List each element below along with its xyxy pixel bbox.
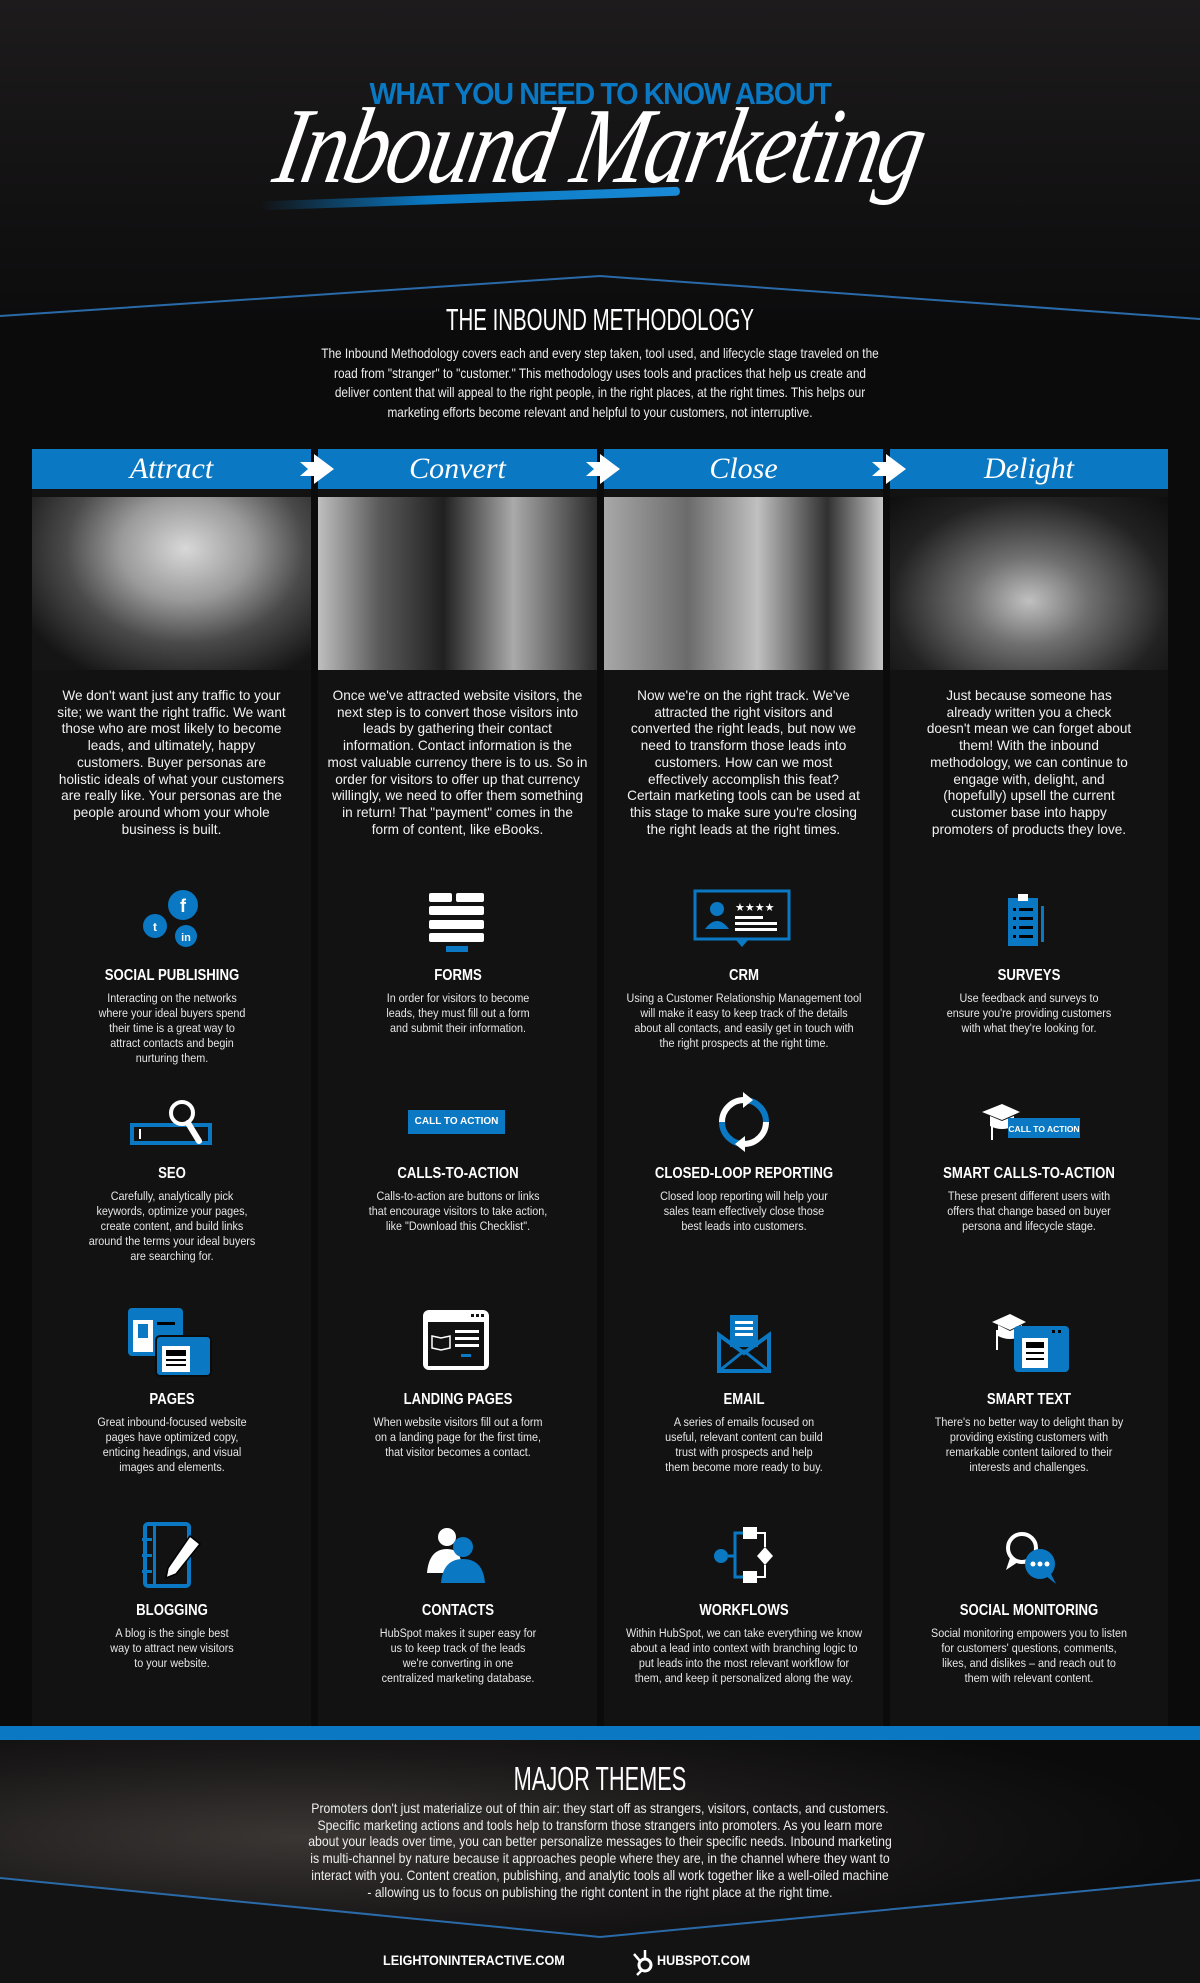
item: workflows: them, and keep it personalized along the way.: [635, 1671, 853, 1685]
stage header: Convert: [318, 449, 597, 489]
footer: hubspot logo: [632, 1946, 656, 1976]
stage header: Attract: Attract: [130, 452, 213, 485]
item: pages: [97, 1391, 247, 1474]
text: convert: order for visitors to offer up that currency: [335, 772, 580, 787]
major themes background: [0, 1740, 1200, 1983]
icon: social: [143, 890, 198, 947]
text: close: Certain marketing tools can be used at: [627, 788, 860, 803]
text: close: attracted the right visitors and: [654, 705, 833, 720]
item: seo: keywords, optimize your pages,: [97, 1204, 247, 1218]
item: crm: the right prospects at the right time.: [660, 1036, 828, 1050]
item: contacts: us to keep track of the leads: [391, 1641, 525, 1655]
text: delight: Just because someone has: [946, 688, 1112, 703]
item: calls-to-action: CALLS-TO-ACTION: [397, 1165, 519, 1182]
methodology intro text: marketing efforts become relevant and helpful to your customers, not interruptive.: [387, 404, 813, 420]
major themes text: is multi-channel by nature because it approaches people where they are, in the channel where they want to: [310, 1851, 890, 1866]
item: social publishing: Interacting on the networks: [107, 991, 237, 1005]
item: calls-to-action: like "Download this Checklist".: [386, 1219, 530, 1233]
blue band: [0, 1726, 1200, 1740]
text: convert: information. Contact information is the: [343, 738, 572, 753]
item: closed-loop reporting: [655, 1165, 833, 1233]
item: pages: enticing headings, and visual: [103, 1445, 241, 1459]
item: social publishing: where your ideal buyers spend: [99, 1006, 245, 1020]
title: [266, 76, 934, 210]
text: delight: methodology, we can continue to: [930, 755, 1128, 770]
icon: smart cta: CALL TO ACTION: [1008, 1124, 1080, 1134]
text: delight: (hopefully) upsell the current: [943, 788, 1115, 803]
stage header: Convert: Convert: [409, 452, 506, 485]
major themes text: - allowing us to focus on publishing the right content in the right place at the right time.: [367, 1885, 833, 1900]
icon: seo: [130, 1100, 212, 1145]
arrow 2: [586, 454, 620, 484]
item: contacts: we're converting in one: [403, 1656, 513, 1670]
methodology intro text: deliver content that will appeal to the right people, in the right places, at the right times. This helps our: [335, 385, 865, 400]
item: landing pages: on a landing page for the first time,: [375, 1430, 541, 1444]
item: crm: Using a Customer Relationship Management tool: [627, 991, 861, 1005]
item: seo: Carefully, analytically pick: [111, 1189, 233, 1203]
stage header: Attract: [32, 449, 311, 489]
major themes text: about your leads over time, you can better personalize messages to their specific needs. Inbound marketing: [308, 1834, 892, 1849]
item: email: them become more ready to buy.: [665, 1460, 823, 1474]
icon: social: t: [153, 920, 157, 934]
item: workflows: WORKFLOWS: [699, 1602, 789, 1619]
item: seo: [89, 1165, 255, 1263]
item: crm: about all contacts, and easily get in touch with: [634, 1021, 854, 1035]
major themes text: Promoters don't just materialize out of thin air: they start off as strangers, visitors, contacts, and customers.: [311, 1801, 889, 1816]
icon: blogging: [142, 1522, 201, 1588]
top chevron line: [0, 275, 1200, 320]
item: crm: [627, 967, 861, 1050]
item: blogging: [110, 1602, 234, 1670]
icon: call to action: CALL TO ACTION: [415, 1116, 498, 1127]
item: smart calls-to-action: These present different users with: [948, 1189, 1110, 1203]
item: contacts: HubSpot makes it super easy for: [380, 1626, 536, 1640]
icon: pages: [128, 1308, 210, 1375]
item: smart text: interests and challenges.: [969, 1460, 1089, 1474]
methodology intro text: The Inbound Methodology covers each and every step taken, tool used, and lifecycle stage traveled on the: [321, 346, 879, 361]
item: closed-loop reporting: best leads into customers.: [681, 1219, 807, 1233]
text: convert: form of content, like eBooks.: [372, 822, 543, 837]
footer: hubspot: HUBSPOT.COM: [657, 1952, 750, 1968]
icon: smart text: [992, 1314, 1069, 1372]
text: delight: engage with, delight, and: [953, 772, 1105, 787]
item: workflows: about a lead into context with branching logic to: [630, 1641, 858, 1655]
icon: email: [717, 1315, 771, 1373]
item: blogging: BLOGGING: [136, 1602, 208, 1619]
item: seo: around the terms your ideal buyers: [89, 1234, 255, 1248]
script title: Inbound Marketing: [266, 87, 934, 206]
footer: leighton: LEIGHTONINTERACTIVE.COM: [383, 1952, 565, 1968]
item: social monitoring: for customers' questions, comments,: [941, 1641, 1117, 1655]
item: social publishing: their time is a great way to: [109, 1021, 235, 1035]
item: forms: FORMS: [434, 967, 482, 984]
item: email: [665, 1391, 823, 1474]
item: social publishing: [98, 967, 245, 1065]
icon: social: f: [180, 896, 187, 916]
item: blogging: A blog is the single best: [115, 1626, 229, 1640]
item: smart text: There's no better way to delight than by: [935, 1415, 1123, 1429]
photo: close: [604, 497, 883, 670]
text: close: this stage to make sure you're closing: [630, 805, 857, 820]
photo: attract: [32, 497, 311, 670]
item: social monitoring: SOCIAL MONITORING: [960, 1602, 1098, 1619]
item: smart calls-to-action: [943, 1165, 1115, 1233]
item: email: trust with prospects and help: [675, 1445, 813, 1459]
methodology heading: THE INBOUND METHODOLOGY: [446, 302, 754, 337]
item: social publishing: SOCIAL PUBLISHING: [105, 967, 239, 984]
icon: crm: ★★★★: [735, 901, 775, 914]
icon: crm: [694, 890, 790, 947]
stage header: Delight: Delight: [984, 452, 1074, 485]
text: convert: Once we've attracted website visitors, the: [333, 688, 582, 703]
methodology intro text: [321, 346, 879, 420]
icon: closed loop: [719, 1092, 769, 1152]
item: surveys: Use feedback and surveys to: [959, 991, 1099, 1005]
icon: contacts: [427, 1528, 485, 1583]
item: closed-loop reporting: Closed loop reporting will help your: [660, 1189, 828, 1203]
text: convert: [328, 688, 587, 837]
major themes text: interact with you. Content creation, publishing, and analytic tools all work together like a well-oiled machine: [311, 1868, 889, 1883]
item: social monitoring: [889, 1602, 1169, 1686]
item: smart text: SMART TEXT: [987, 1391, 1071, 1408]
bottom chevron: [0, 1870, 1200, 1983]
item: closed-loop reporting: CLOSED-LOOP REPORTING: [655, 1165, 833, 1182]
item: seo: SEO: [158, 1165, 186, 1182]
brush stroke: [260, 187, 680, 210]
item: social monitoring: them with relevant content.: [965, 1671, 1093, 1685]
major themes heading: MAJOR THEMES: [514, 1760, 686, 1797]
item: social monitoring: Social monitoring empowers you to listen: [931, 1626, 1127, 1640]
icon: smart cta: [982, 1104, 1080, 1140]
item: email: useful, relevant content can build: [665, 1430, 823, 1444]
item: email: EMAIL: [724, 1391, 764, 1408]
item: smart text: remarkable content tailored to their: [946, 1445, 1112, 1459]
icon: call to action: [408, 1110, 505, 1134]
text: convert: next step is to convert those visitors into: [337, 705, 578, 720]
text: convert: leads by gathering their contact: [363, 721, 552, 736]
title kicker: WHAT YOU NEED TO KNOW ABOUT: [370, 76, 830, 111]
icon: forms: [429, 893, 484, 952]
major themes text: [267, 1801, 933, 1901]
text: delight: already written you a check: [947, 705, 1111, 720]
item: crm: will make it easy to keep track of the details: [640, 1006, 848, 1020]
item: landing pages: [374, 1391, 542, 1459]
text: convert: in return! That "payment" comes in the: [342, 805, 573, 820]
photo: delight: [890, 497, 1168, 670]
text: convert: willingly, we need to offer them something: [332, 788, 583, 803]
item: contacts: CONTACTS: [422, 1602, 494, 1619]
text: convert: most valuable currency there is to us. So in: [328, 755, 587, 770]
item: pages: Great inbound-focused website: [97, 1415, 247, 1429]
top background gradient: [0, 0, 1200, 320]
icon: social: in: [181, 932, 191, 944]
text: attract: those who are most likely to become: [62, 721, 281, 736]
text: delight: customer base into happy: [951, 805, 1107, 820]
item: blogging: to your website.: [134, 1656, 210, 1670]
text: close: the right leads at the right times.: [647, 822, 840, 837]
item: calls-to-action: [368, 1165, 547, 1233]
icon: workflows: [714, 1527, 773, 1583]
text: close: Now we're on the right track. We've: [637, 688, 850, 703]
item: forms: and submit their information.: [390, 1021, 526, 1035]
item: closed-loop reporting: sales team effectively close those: [664, 1204, 824, 1218]
item: social publishing: attract contacts and begin: [110, 1036, 234, 1050]
text: attract: are really like. Your personas are the: [61, 788, 282, 803]
item: pages: pages have optimized copy,: [106, 1430, 238, 1444]
item: email: A series of emails focused on: [674, 1415, 814, 1429]
arrow 3: [872, 454, 906, 484]
text: attract: people around whom your whole: [73, 805, 270, 820]
text: close: customers. How can we most: [655, 755, 832, 770]
stage header: Close: [604, 449, 883, 489]
item: workflows: Within HubSpot, we can take everything we know: [626, 1626, 862, 1640]
item: calls-to-action: Calls-to-action are buttons or links: [377, 1189, 539, 1203]
item: smart text: [935, 1391, 1124, 1474]
item: smart calls-to-action: SMART CALLS-TO-ACTION: [943, 1165, 1115, 1182]
icon: social monitoring: [1006, 1532, 1056, 1584]
item: forms: [386, 967, 530, 1035]
text: close: effectively accomplish this feat?: [648, 772, 839, 787]
item: workflows: [626, 1602, 862, 1685]
item: contacts: [380, 1602, 536, 1685]
text: close: [627, 688, 860, 837]
item: pages: PAGES: [149, 1391, 195, 1408]
item: surveys: ensure you're providing customers: [947, 1006, 1111, 1020]
text: attract: leads, and ultimately, happy: [88, 738, 255, 753]
arrow 1: [300, 454, 334, 484]
text: delight: doesn't mean we can forget about: [927, 721, 1131, 736]
item: forms: In order for visitors to become: [387, 991, 529, 1005]
item: smart text: providing existing customers with: [950, 1430, 1108, 1444]
item: seo: create content, and build links: [101, 1219, 243, 1233]
text: delight: promoters of products they love.: [932, 822, 1126, 837]
item: contacts: centralized marketing database.: [382, 1671, 534, 1685]
text: attract: customers. Buyer personas are: [77, 755, 266, 770]
text: delight: [927, 688, 1132, 837]
item: surveys: [947, 967, 1111, 1035]
item: surveys: with what they're looking for.: [961, 1021, 1097, 1035]
item: pages: images and elements.: [119, 1460, 225, 1474]
item: landing pages: that visitor becomes a contact.: [385, 1445, 531, 1459]
item: social publishing: nurturing them.: [136, 1051, 208, 1065]
stage header: Close: Close: [709, 452, 778, 485]
item: seo: are searching for.: [130, 1249, 214, 1263]
item: surveys: SURVEYS: [998, 967, 1060, 984]
text: close: converted the right leads, but now we: [631, 721, 856, 736]
icon: landing pages: [423, 1310, 489, 1370]
item: workflows: put leads into the most relevant workflow for: [639, 1656, 849, 1670]
text: close: need to transform those leads into: [641, 738, 846, 753]
item: landing pages: LANDING PAGES: [404, 1391, 512, 1408]
item: landing pages: When website visitors fill out a form: [374, 1415, 542, 1429]
item: calls-to-action: that encourage visitors to take action,: [369, 1204, 547, 1218]
methodology intro text: road from "stranger" to "customer." This methodology uses tools and practices that help us create and: [334, 366, 866, 380]
item: social monitoring: likes, and dislikes – and reach out to: [942, 1656, 1116, 1670]
item: crm: CRM: [729, 967, 759, 984]
icon: surveys: [1008, 894, 1044, 946]
text: attract: holistic ideals of what your customers: [59, 772, 284, 787]
major themes text: Specific marketing actions and tools help to transform those strangers into promoters. As you learn more: [317, 1818, 883, 1833]
item: blogging: way to attract new visitors: [110, 1641, 234, 1655]
photo: convert: [318, 497, 597, 670]
text: delight: them! With the inbound: [959, 738, 1099, 753]
text: attract: [57, 688, 286, 837]
stage header: Delight: [890, 449, 1168, 489]
text: attract: We don't want just any traffic to your: [62, 688, 281, 703]
item: smart calls-to-action: persona and lifecycle stage.: [962, 1219, 1096, 1233]
text: attract: business is built.: [122, 822, 221, 837]
text: attract: site; we want the right traffic. We want: [57, 705, 286, 720]
item: smart calls-to-action: offers that change based on buyer: [947, 1204, 1111, 1218]
item: forms: leads, they must fill out a form: [386, 1006, 530, 1020]
